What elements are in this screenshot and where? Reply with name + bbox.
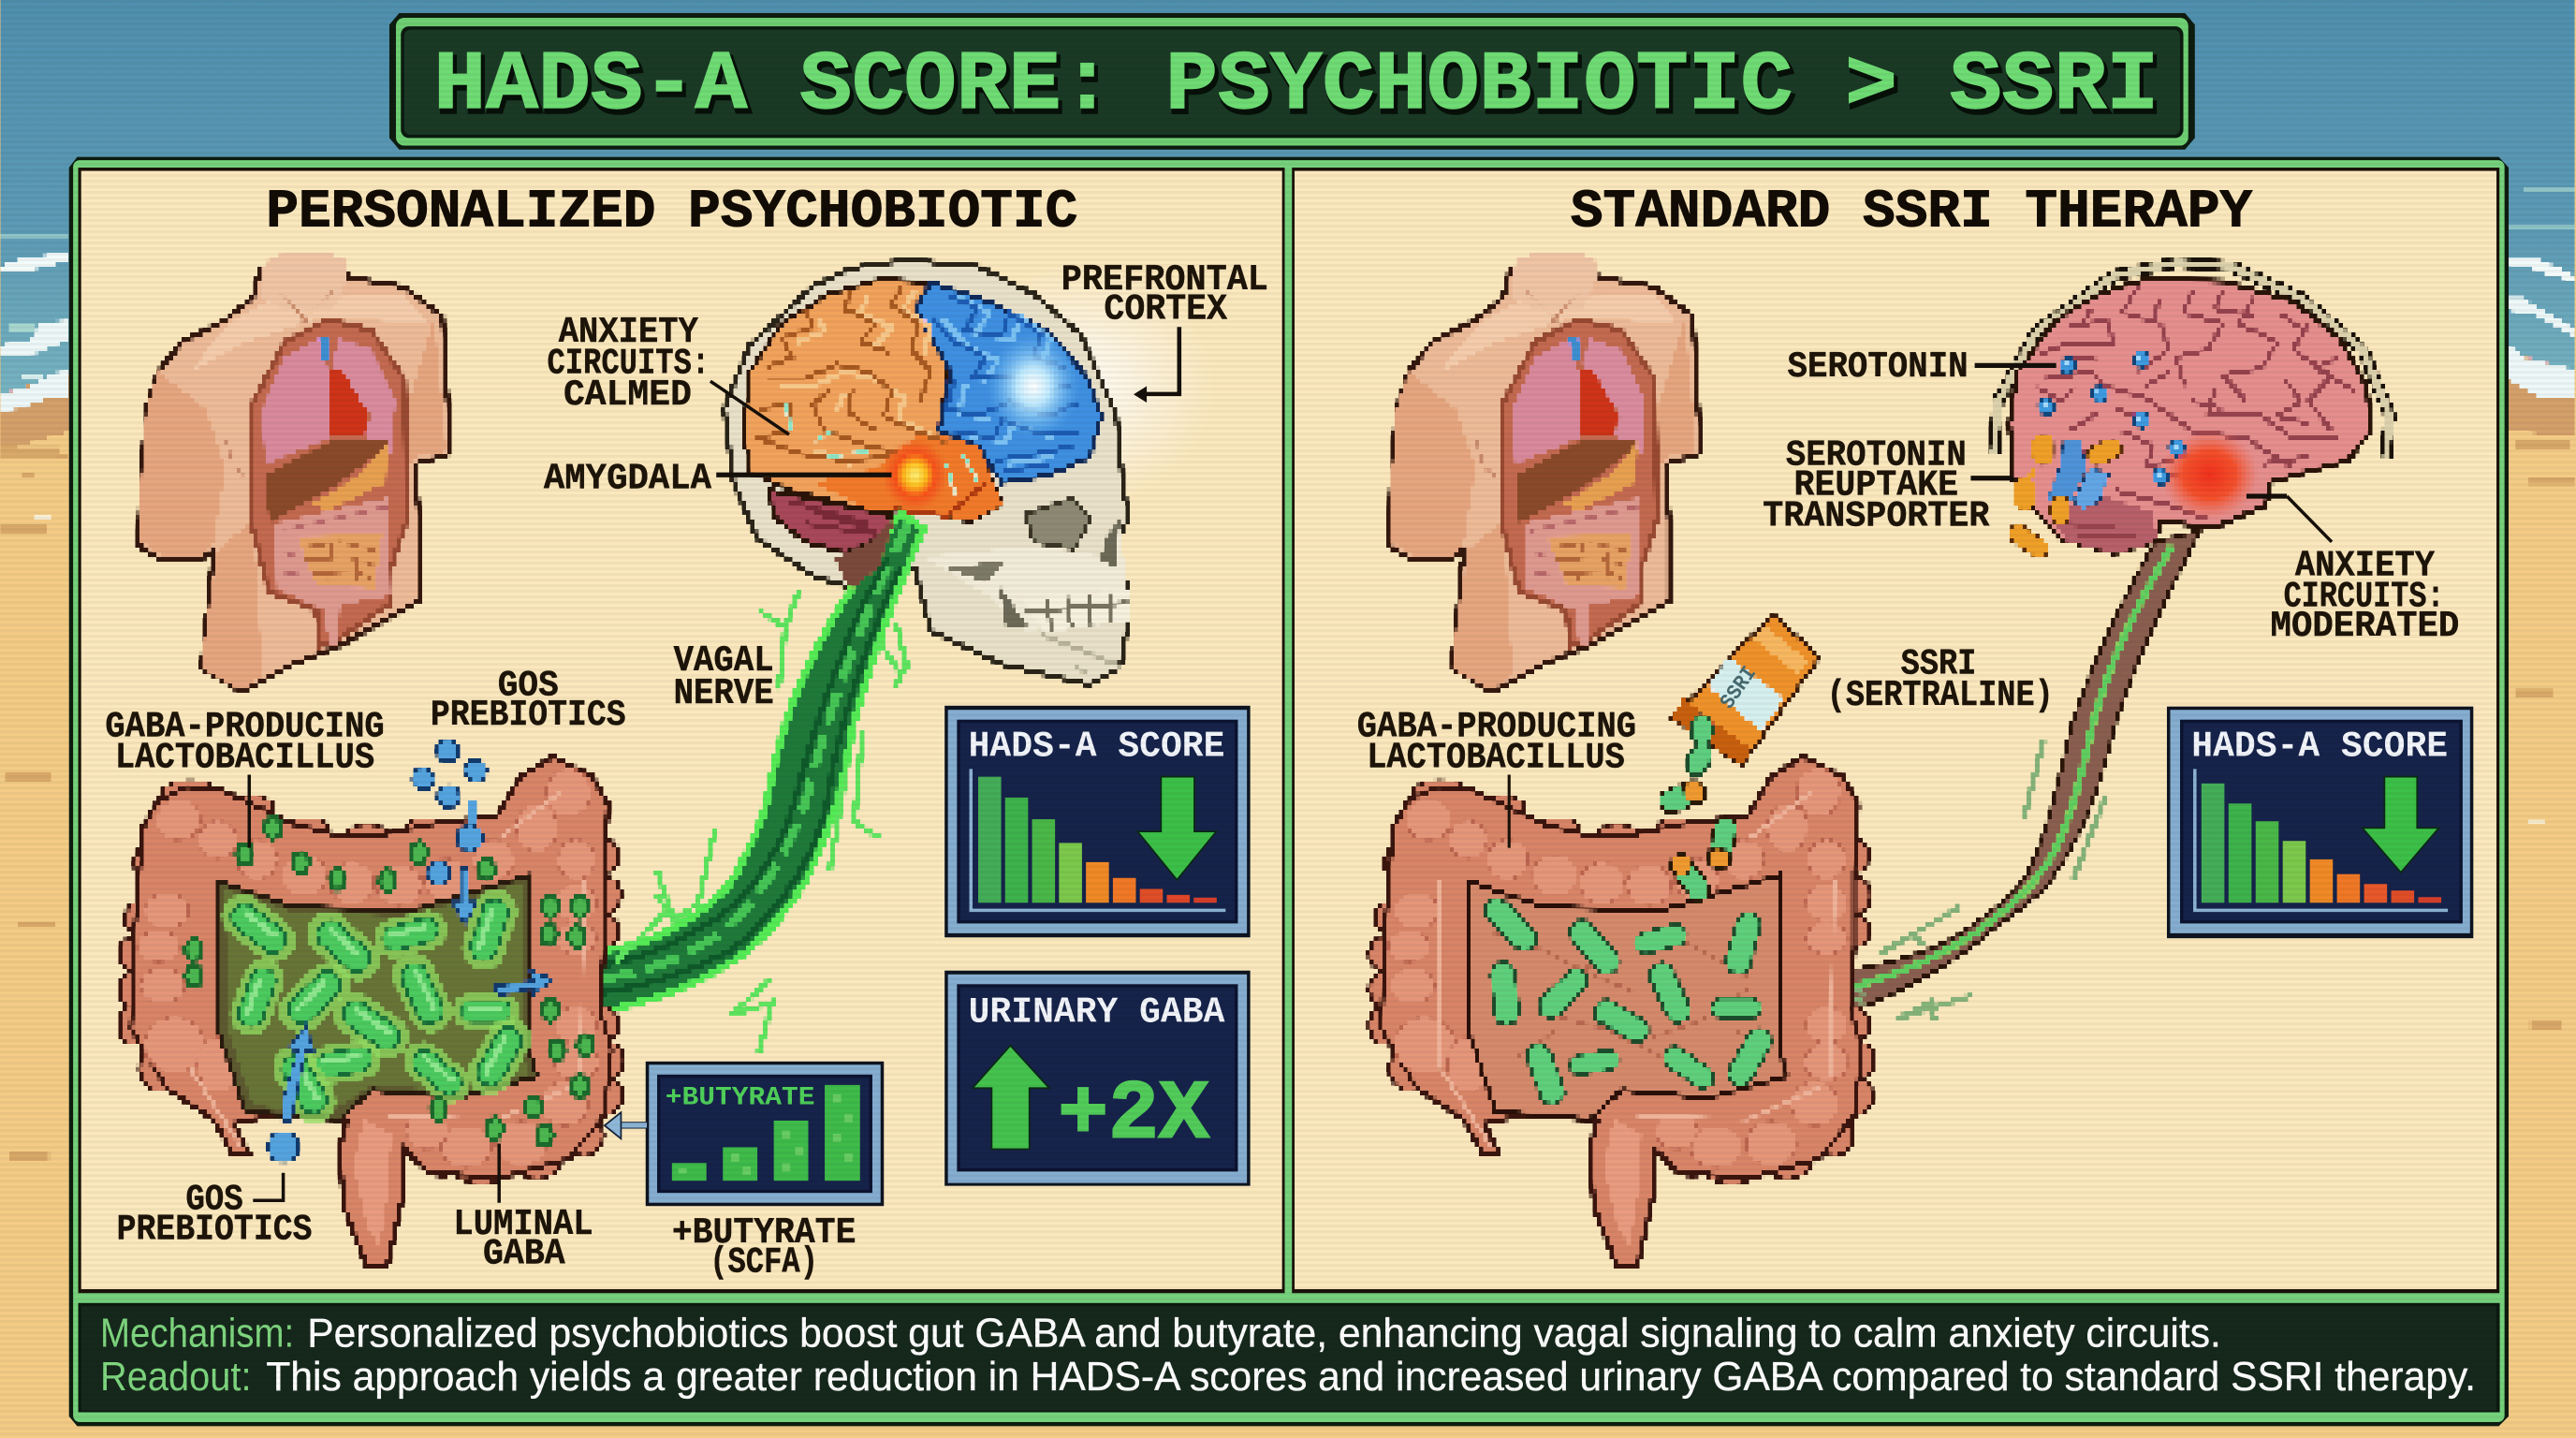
label: prefrontal cortex: PREFRONTAL [1061,259,1268,301]
butyrate bar label: +BUTYRATE [666,1083,815,1112]
panel: standard SSRI background [1292,168,2499,1293]
monitor: HADS-A score right [2167,707,2473,938]
label: SSRI sertraline: (SERTRALINE) [1827,675,2054,716]
label: GABA-producing lactobacillus left [105,706,385,779]
leader lines: right panel [1509,365,2332,848]
footer: mechanism and readout [79,1303,2500,1412]
icon: active gut with glowing lactobacillus [119,741,623,1268]
serotonin dots [2037,350,2186,486]
panel: personalized psychobiotic background [79,168,1284,1293]
label: anxiety circuits moderated [2271,545,2459,647]
label: amygdala: AMYGDALA [544,458,712,499]
label: GABA-producing lactobacillus left: GABA-PRODUCING [105,706,385,747]
label: GOS prebiotics bottom: PREBIOTICS [117,1209,312,1250]
title banner [389,13,2195,150]
readout label: Readout: [100,1354,252,1400]
label: anxiety circuits calmed: CIRCUITS: [547,343,710,384]
label: anxiety circuits moderated: CIRCUITS: [2284,577,2445,618]
label: anxiety circuits calmed [547,312,710,416]
label: luminal GABA: GABA [483,1234,566,1275]
label: serotonin reuptake transporter: SEROTONIN [1786,435,1967,477]
label: serotonin reuptake transporter: REUPTAKE [1794,464,1958,506]
label: prefrontal cortex [1061,259,1268,330]
mechanism text: Personalized psychobiotics boost gut GABA and butyrate, enhancing vagal signaling to calm anxiety circuits. [307,1310,2221,1356]
label: anxiety circuits moderated: ANXIETY [2295,545,2436,586]
label: luminal GABA [453,1204,593,1275]
monitor: urinary GABA [944,971,1251,1186]
label: GOS prebiotics top [431,665,626,736]
orange SSRI molecules [2006,433,2125,561]
label: serotonin reuptake transporter: TRANSPORTER [1763,496,1990,537]
value: +2X: +2X [1058,1067,1209,1163]
label: vagal nerve: VAGAL [674,640,774,682]
label: butyrate SCFA [672,1212,856,1283]
up arrow [973,1046,1049,1150]
label: GOS prebiotics bottom: GOS [185,1180,243,1221]
monitor: HADS-A score left [944,706,1251,937]
falling capsules [1657,778,1738,904]
label: SSRI sertraline [1827,644,2054,716]
small bacteria in colon wall [183,815,596,1149]
heading: standard SSRI therapy: STANDARD SSRI THERAPY [1571,183,2252,243]
glow around prefrontal cortex [936,263,1216,509]
label: butyrate SCFA: +BUTYRATE [672,1212,856,1254]
icon: skull and activated brain [724,260,1128,684]
label: luminal GABA: LUMINAL [453,1204,593,1245]
bottle label text: SSRI [1716,662,1762,713]
down arrow [2363,777,2438,873]
widget title: URINARY GABA [969,992,1225,1034]
bacteria in lumen [1477,891,1778,1110]
vagal nerve, glowing [568,513,923,1051]
icon: left torso anatomy [139,253,450,692]
arrow: butyrate into gut [605,1112,648,1138]
icon: SSRI pill bottle with falling capsules [1657,614,1820,904]
chart axes [2195,769,2448,910]
descending bar chart [978,777,1217,902]
widget title: HADS-A SCORE [969,726,1224,767]
label: GOS prebiotics bottom [117,1180,312,1250]
leader lines: left panel [249,327,1179,1203]
icon: right torso anatomy [1389,253,1701,692]
label: anxiety circuits calmed: ANXIETY [559,312,699,353]
left cream surface [81,171,1282,1289]
label: GOS prebiotics top: GOS [498,665,559,706]
title text: HADS-A SCORE: PSYCHOBIOTIC > SSRI [433,37,2159,133]
right cream surface [1295,171,2496,1289]
mechanism label: Mechanism: [100,1310,294,1356]
serotonin reuptake transporter [2047,440,2110,509]
blue prebiotic molecules and arrows [269,741,553,1162]
widget title: HADS-A SCORE [2191,726,2448,767]
label: prefrontal cortex: CORTEX [1104,288,1228,330]
label: SSRI sertraline: SSRI [1901,644,1976,685]
label: GOS prebiotics top: PREBIOTICS [431,695,626,736]
descending bar chart [2202,784,2441,902]
title text shadow: HADS-A SCORE: PSYCHOBIOTIC > SSRI [436,41,2161,137]
label: serotonin reuptake transporter [1763,435,1990,537]
down arrow [1137,777,1216,880]
nerve from gut to brain, subdued [1827,531,2200,1022]
label: vagal nerve: NERVE [674,673,774,714]
label: GABA-producing lactobacillus left: LACTOBACILLUS [115,738,374,779]
heading: personalized psychobiotic: PERSONALIZED PSYCHOBIOTIC [266,183,1077,243]
readout text: This approach yields a greater reduction in HADS-A scores and increased urinary GABA compared to standard SSRI therapy. [266,1354,2476,1400]
monitor: butyrate bars [646,1062,884,1206]
icon: pink brain with serotonin [1994,263,2390,561]
butyrate bar chart [672,1085,860,1181]
icon: standard gut with sparse bacteria [1369,757,1874,1268]
label: vagal nerve [674,640,774,714]
label: anxiety circuits calmed: CALMED [564,374,692,416]
label: anxiety circuits moderated: MODERATED [2271,606,2459,647]
label: GABA-producing lactobacillus right [1357,706,1636,779]
bacteria in lumen [213,885,538,1131]
label: serotonin: SEROTONIN [1788,346,1969,388]
chart axes [971,769,1225,910]
label: butyrate SCFA: (SCFA) [710,1241,818,1283]
label: GABA-producing lactobacillus right: LACTOBACILLUS [1367,738,1625,779]
bar texture [679,1094,853,1175]
label: GABA-producing lactobacillus right: GABA-PRODUCING [1357,706,1636,747]
